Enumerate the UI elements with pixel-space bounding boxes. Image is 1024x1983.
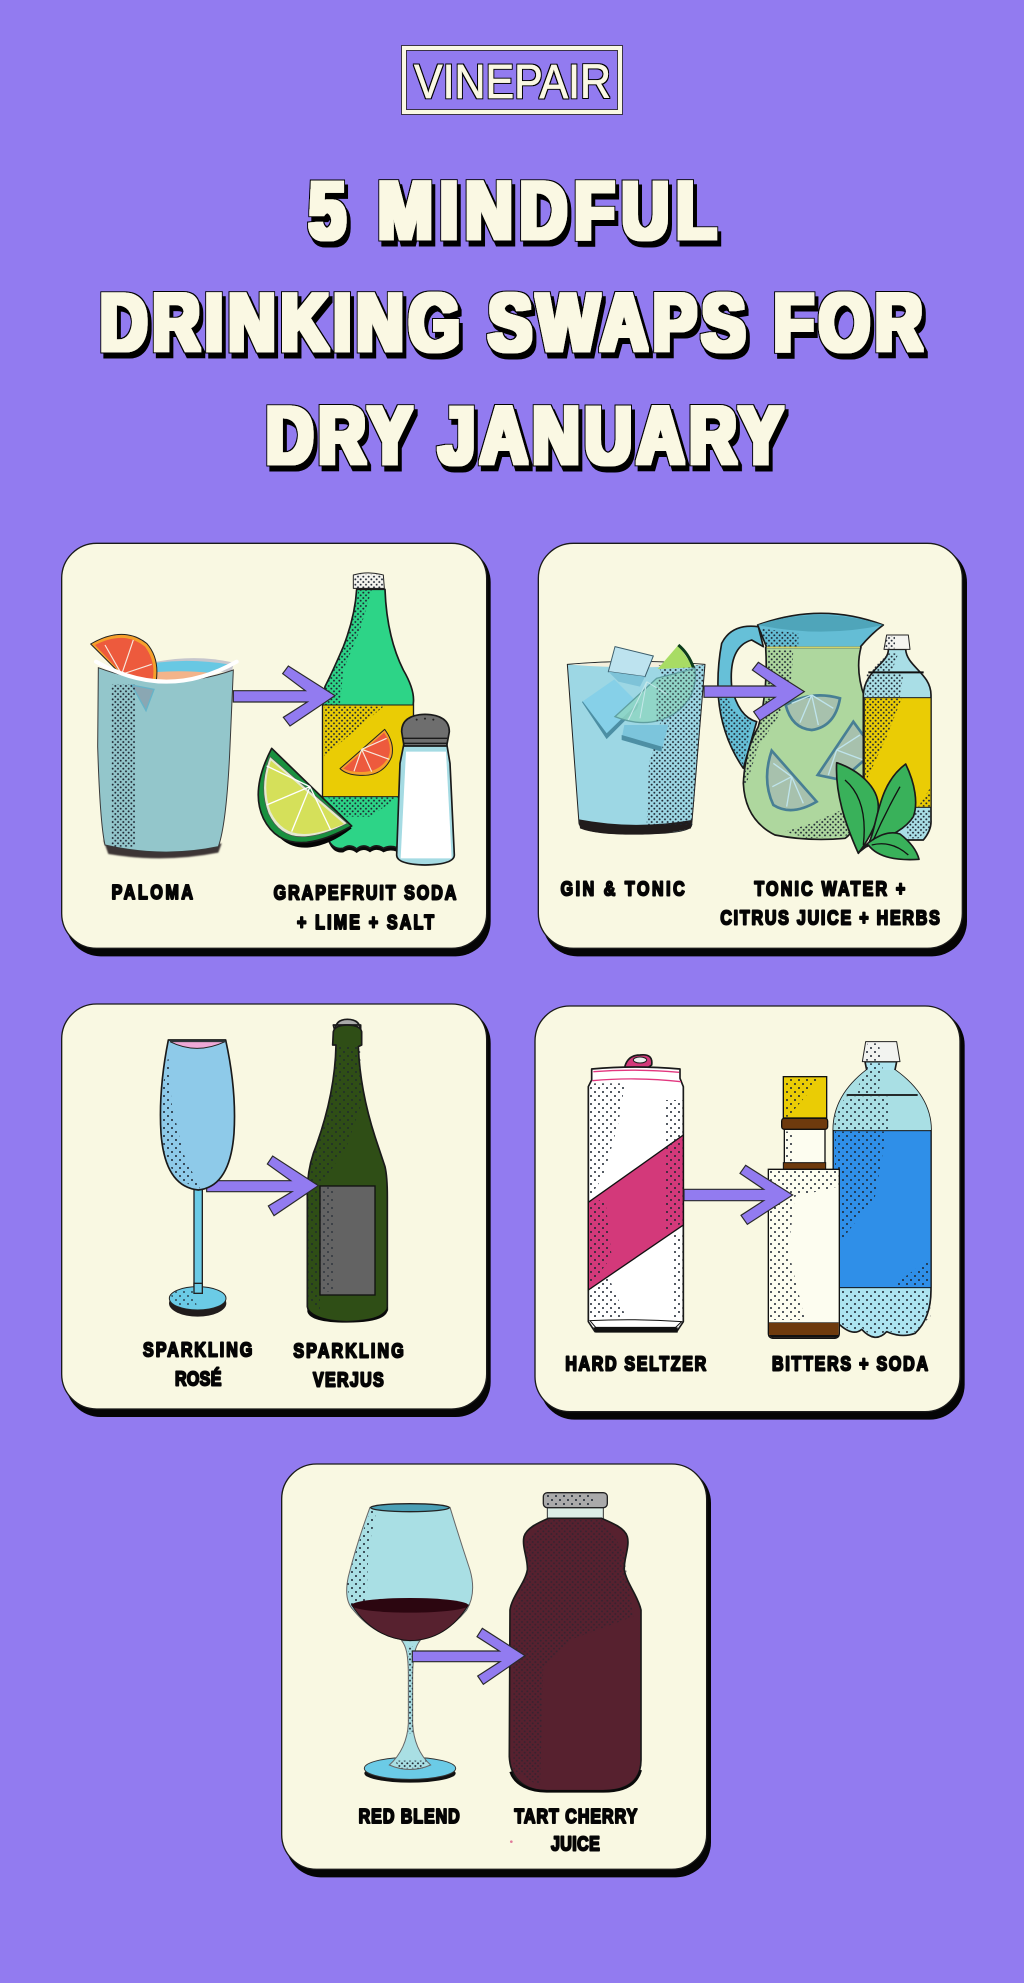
icon: salt shaker <box>397 714 454 865</box>
title <box>100 165 922 481</box>
icon: soda bottle <box>833 1042 931 1337</box>
label: grapefruit soda lime salt <box>274 882 456 933</box>
icon: bitters bottle <box>768 1077 839 1338</box>
label: paloma: PALOMA <box>112 881 193 903</box>
panel: sparkling rose swap <box>62 1004 491 1417</box>
label: bitters and soda: BITTERS + SODA <box>772 1353 928 1375</box>
label: sparkling verjus: VERJUS <box>313 1369 384 1391</box>
title: 5 MINDFUL <box>309 165 716 256</box>
label: sparkling rose <box>143 1339 252 1390</box>
icon: tonic bottle <box>863 635 931 840</box>
panel: paloma swap <box>62 543 491 956</box>
label: tonic water citrus juice herbs: CITRUS JUICE + HERBS <box>720 907 940 929</box>
icon: gin and tonic glass <box>567 645 705 835</box>
arrow: red blend to cherry juice <box>412 1628 525 1684</box>
label: sparkling verjus: SPARKLING <box>293 1340 404 1362</box>
icon: champagne flute <box>160 1040 235 1317</box>
label: tart cherry juice: JUICE <box>551 1833 600 1855</box>
icon: red wine glass <box>347 1504 473 1783</box>
icon: tart cherry juice bottle <box>509 1493 641 1791</box>
icon: hard seltzer can <box>588 1055 683 1333</box>
label: sparkling rose: ROSÉ <box>175 1367 221 1390</box>
label: tart cherry juice <box>514 1805 637 1855</box>
label: tonic water citrus juice herbs: TONIC WATER + <box>754 878 905 900</box>
label: tart cherry juice: TART CHERRY <box>514 1805 637 1827</box>
label: sparkling verjus <box>293 1340 404 1391</box>
panel: red blend swap <box>282 1464 711 1877</box>
icon: grapefruit soda bottle <box>323 573 414 853</box>
title: DRINKING SWAPS FOR <box>100 277 922 368</box>
icon: sparkling verjus bottle <box>307 1019 387 1323</box>
label: grapefruit soda lime salt: GRAPEFRUIT SODA <box>274 882 456 904</box>
arrow: rose to verjus <box>207 1156 318 1216</box>
arrow: seltzer to bitters <box>684 1165 793 1224</box>
icon: pitcher of tonic and citrus <box>718 613 883 839</box>
label: red blend: RED BLEND <box>359 1805 460 1827</box>
icon: paloma glass with grapefruit <box>91 634 237 858</box>
label: tonic water citrus juice herbs <box>720 878 940 929</box>
label: sparkling rose: SPARKLING <box>143 1339 252 1361</box>
title: DRY JANUARY <box>266 390 783 481</box>
arrow: paloma to soda <box>233 666 335 726</box>
label: hard seltzer: HARD SELTZER <box>565 1353 706 1375</box>
arrow: gin and tonic to pitcher <box>704 662 804 721</box>
icon: mint leaves <box>836 763 919 860</box>
panel: gin and tonic swap <box>538 543 967 956</box>
icon: lime wedge <box>258 748 352 848</box>
label: grapefruit soda lime salt: + LIME + SALT <box>297 911 434 933</box>
logo: VinePair: VINEPAIR <box>414 56 611 109</box>
panel: hard seltzer swap <box>535 1006 965 1420</box>
label: gin and tonic: GIN & TONIC <box>561 878 685 900</box>
